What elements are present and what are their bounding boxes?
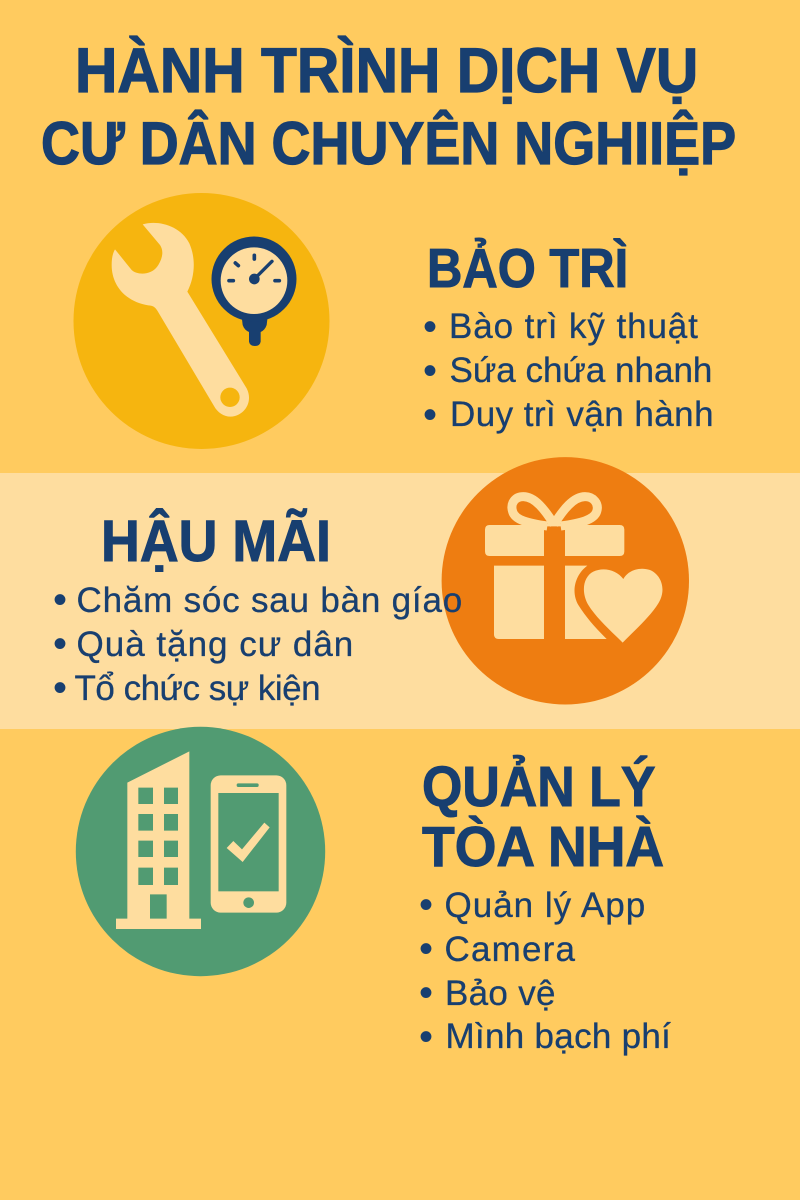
title: HÀNH TRÌNH DỊCH VỤ bbox=[75, 36, 698, 106]
list: Bảo trì bbox=[423, 305, 714, 436]
text: • bbox=[53, 622, 67, 666]
text: Bảo vệ bbox=[445, 974, 556, 1013]
list: Quản lý tòa nhà bbox=[419, 882, 671, 1058]
heading: Hậu mãi: HẬU MÃI bbox=[101, 509, 331, 574]
text: • bbox=[423, 349, 437, 393]
text: • bbox=[53, 666, 67, 710]
heading: Quản lý tòa nhà: TÒA NHÀ bbox=[422, 814, 664, 878]
text: Duy trì vận hành bbox=[450, 395, 714, 434]
text: • bbox=[419, 882, 433, 926]
text: • bbox=[423, 392, 437, 436]
heading: Quản lý tòa nhà: QUẢN LÝ bbox=[422, 755, 655, 819]
text: • bbox=[53, 578, 67, 622]
text: Camera bbox=[444, 930, 576, 969]
text: • bbox=[419, 970, 433, 1014]
text: Quà tặng cư dân bbox=[76, 624, 354, 664]
text: • bbox=[419, 926, 433, 970]
text: Sứa chứa nhanh bbox=[450, 351, 712, 390]
heading: Bảo trì: BẢO TRÌ bbox=[427, 236, 628, 298]
text: Mình bạch phí bbox=[446, 1017, 671, 1056]
text: Tổ chức sự kiện bbox=[74, 668, 320, 708]
text: • bbox=[419, 1014, 433, 1058]
text: Quản lý App bbox=[444, 886, 646, 925]
text: Bào trì kỹ thuật bbox=[449, 307, 699, 346]
heading: Quản lý tòa nhà bbox=[422, 754, 664, 878]
text: • bbox=[423, 305, 437, 349]
list: Hậu mãi bbox=[53, 578, 463, 710]
middle band bbox=[0, 473, 800, 729]
title: CƯ DÂN CHUYÊN NGHIIỆP bbox=[41, 110, 736, 177]
text: Chăm sóc sau bàn gíao bbox=[76, 580, 463, 620]
title bbox=[41, 35, 736, 177]
